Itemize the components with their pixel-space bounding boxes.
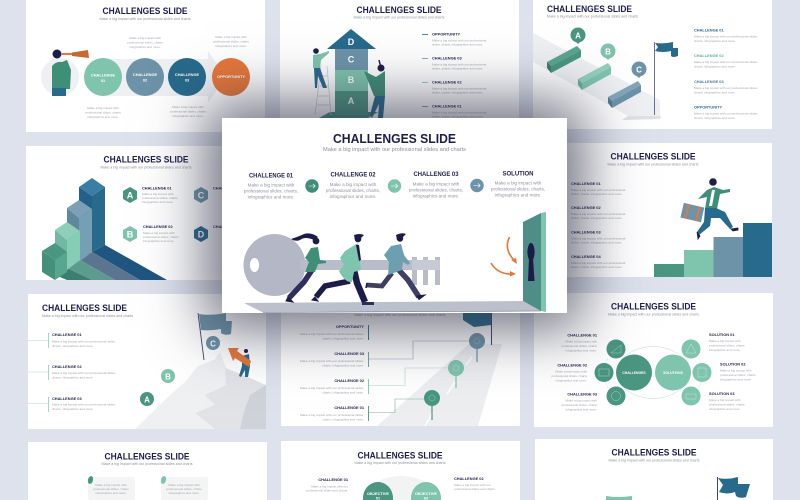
list: challenges text: Make a big impact with [556, 370, 587, 374]
arrow: challenge 01 to 02 [305, 179, 319, 193]
list: solutions text: Make a big impact with [709, 339, 741, 343]
list: solutions text: professional slides, charts [720, 373, 756, 377]
panel: slide with challenges and solutions cycle [534, 293, 773, 427]
list: stair challenges: slides, charts, infographics and more. [571, 265, 622, 269]
list: solutions text: infographics and more. [709, 348, 741, 352]
panel: featured slide background with shadow [222, 118, 567, 313]
icon: mint flag [606, 496, 632, 500]
list: house levels: Make a big impact with our professional [432, 62, 487, 66]
chart: objective shapes: OBJECTIVE [367, 491, 389, 496]
list: mountain challenges: charts, infographics and more. [52, 407, 94, 411]
text: slide 7 subtitle: Make a big impact with our professional slides and charts [42, 314, 133, 318]
card: second card [160, 475, 208, 500]
chart: arrow house with letters: B [348, 75, 355, 85]
icon: person on ladder [313, 48, 329, 88]
chart: stairs [654, 223, 772, 277]
list: mountain challenges: CHALLENGE 02 [52, 364, 82, 369]
circle: challenge 03: CHALLENGE [175, 72, 200, 77]
list: road challenges [694, 28, 758, 120]
icon: door with keyhole [523, 212, 546, 312]
icon: running man with briefcase [680, 178, 738, 239]
text: slide 1 subtitle: Make a big impact with our professional slides and charts [99, 17, 191, 21]
list: mountain challenges: charts, infographics and more. [52, 344, 94, 348]
icon: mountain [135, 352, 266, 429]
list: road challenges: CHALLENGE 03 [694, 79, 724, 84]
chart: isometric bars [42, 178, 167, 280]
list: road levels: CHALLENGE 03 [334, 351, 365, 356]
circle: opportunity [212, 58, 250, 96]
circle: challenge 01 [84, 58, 122, 96]
list: road levels: Make a big impact with our professional slides, [300, 413, 364, 417]
icon: block C with marker [608, 62, 646, 108]
list: solutions text: SOLUTION 02 [720, 362, 746, 366]
icon: block A with marker [547, 28, 586, 73]
icon: finish flag [622, 42, 678, 120]
list: stair challenges: Make a big impact with our professional [571, 212, 626, 216]
text: circle captions: infographics and more. [87, 115, 119, 119]
list: house levels [422, 32, 487, 118]
list: solutions text: professional slides, charts [709, 344, 745, 348]
text: circle captions [85, 35, 249, 119]
icon: block B with marker [578, 44, 616, 90]
list: house levels: Make a big impact with our professional [432, 86, 487, 90]
text: circle captions: professional slides, charts [213, 40, 249, 44]
list: stair challenges: Make a big impact with our professional [571, 261, 626, 265]
list: stair challenges: slides, charts, infographics and more. [571, 216, 622, 220]
list: road challenges: Make a big impact with our professional slides, [694, 60, 758, 64]
circle: challenge 03: 03 [185, 78, 190, 82]
panel: slide with mountain climb [28, 294, 266, 429]
text block: solution: Make a big impact with [495, 180, 542, 186]
list: road challenges: charts, infographics and more. [694, 64, 736, 68]
text: circle captions: Make a big impact with [87, 106, 119, 110]
text block: solution: SOLUTION [502, 170, 534, 178]
card: second card: infographics and more. [168, 491, 200, 495]
list: solutions text: Make a big impact with [720, 368, 752, 372]
icon: climber with orange arrow [228, 348, 251, 377]
list: house levels: Make a big impact with our professional [432, 38, 487, 42]
circle: marker C: C [210, 340, 216, 348]
text block: challenge 03: infographics and more. [413, 194, 459, 198]
icon: ladder [315, 66, 331, 115]
list: challenges text: CHALLENGE 02 [557, 362, 588, 368]
icon: hexagon C: CHALLENGE 03 [213, 186, 243, 190]
icon: block A with marker: A [575, 32, 581, 40]
icon: diagonal road [533, 33, 660, 118]
list: solutions text: SOLUTION 01 [709, 332, 735, 337]
circle: marker B [161, 369, 175, 383]
list: challenges text [551, 332, 598, 412]
card: first card: Make a big impact with [95, 483, 127, 487]
list: challenges text: infographics and more. [566, 408, 597, 412]
heading: slide 4 title: CHALLENGES SLIDE [104, 154, 188, 166]
icon: hexagon B with text [123, 224, 179, 243]
icon: block C with marker: C [636, 66, 642, 74]
heading: slide 9 title: CHALLENGES SLIDE [611, 302, 696, 312]
text: slide 5 subtitle: Make a big impact with our professional slides and charts [607, 162, 699, 166]
icon: hexagon C [194, 186, 243, 203]
text: circle captions: infographics and more. [215, 44, 247, 48]
list: road levels: charts, infographics and more. [322, 336, 364, 340]
card: first card: professional slides, charts [93, 487, 129, 491]
text: challenge 02: Make a big impact with our [454, 483, 491, 487]
icon: running woman [286, 233, 326, 302]
list: solutions text: professional slides, charts [709, 402, 745, 406]
chart: arrow house with letters: A [348, 96, 355, 106]
text block: challenge 03: professional slides, charts, [409, 188, 463, 192]
text block: challenge 01 [244, 172, 298, 200]
list: road challenges: charts, infographics and more. [694, 116, 736, 120]
icon: hexagon A with text: Make a big impact with [142, 192, 174, 196]
circle: challenge 01: CHALLENGE [91, 72, 116, 78]
heading: slide 3 title: CHALLENGES SLIDE [547, 4, 632, 15]
text: circle captions: professional slides, charts [85, 110, 121, 114]
text: challenge 02: professional slides and charts. [454, 487, 496, 491]
chart: arrow house with letters: C [348, 54, 355, 64]
text: slide 10 subtitle: Make a big impact with our professional slides and charts [101, 462, 193, 466]
list: stair challenges: slides, charts, infographics and more. [571, 240, 622, 244]
list: mountain challenges: Make a big impact with our professional slides, [52, 371, 116, 375]
list: house levels: slides, charts, infographics and more. [432, 42, 483, 46]
card: first card: infographics and more. [95, 491, 127, 495]
circle: marker A: A [144, 396, 150, 404]
icon: running man in slate [366, 233, 425, 300]
icon: hexagon D: D [198, 230, 205, 240]
chart: cycle diagram: CHALLENGES [622, 371, 646, 375]
list: road levels: charts, infographics and more. [322, 418, 364, 422]
text block: solution: infographics and more. [495, 192, 541, 198]
heading: slide 1 title: CHALLENGES SLIDE [102, 6, 188, 17]
icon: flag on summit [198, 313, 232, 360]
icon: running man in mint [312, 234, 374, 305]
text: challenge 02 [454, 476, 496, 491]
heading: slide 2 title: CHALLENGES SLIDE [356, 5, 442, 16]
icon: hexagon D [194, 224, 243, 242]
list: road levels: CHALLENGE 01 [334, 405, 365, 410]
list: solutions text [709, 332, 756, 411]
text block: solution [491, 170, 545, 198]
list: mountain challenges: charts, infographics and more. [52, 376, 94, 380]
panel: slide with man climbing stairs [540, 143, 772, 277]
panel: slide with arrow house and two people [280, 0, 519, 120]
panel: bottom left slide with cards [28, 442, 267, 500]
text block: challenge 01: CHALLENGE 01 [249, 172, 294, 180]
text: featured subtitle: Make a big impact with our professional slides and charts [323, 147, 466, 153]
list: challenges text: CHALLENGE 01 [567, 332, 598, 338]
text block: challenge 01: professional slides, charts, [244, 188, 298, 194]
list: challenges text: CHALLENGE 03 [567, 392, 598, 396]
text: slide 2 subtitle: Make a big impact with our professional slides and charts [353, 16, 445, 20]
list: challenges text: professional slides, charts [551, 374, 587, 378]
circle: marker B: B [165, 372, 171, 382]
text: challenge 01 [306, 477, 349, 492]
list: house levels: slides, charts, infographics and more. [432, 90, 483, 94]
circle: marker C [206, 336, 220, 350]
text: challenge 01: Make a big impact with our [311, 484, 348, 488]
text block: challenge 01: infographics and more. [248, 194, 294, 200]
list: road challenges: OPPORTUNITY [694, 104, 723, 110]
list: mountain challenges: CHALLENGE 01 [52, 332, 82, 337]
list: road challenges: CHALLENGE 02 [694, 53, 724, 58]
circle: challenge 02: 02 [143, 78, 148, 82]
text block: challenge 02 [326, 172, 380, 199]
chart: objective shapes [363, 476, 441, 500]
circle: challenge 02: CHALLENGE [133, 72, 158, 77]
icon: hexagon A with text [123, 186, 178, 204]
text: circle captions: professional slides, charts [127, 40, 163, 44]
icon: hexagon D: CHALLENGE 04 [213, 224, 243, 229]
list: road levels: CHALLENGE 02 [334, 378, 365, 383]
list: solutions text: SOLUTION 03 [709, 391, 735, 396]
card: second card: Make a big impact with [168, 483, 200, 487]
text: slide 4 subtitle: Make a big impact with our professional slides and charts [100, 166, 192, 170]
card: first card [87, 475, 135, 500]
text: slide 3 subtitle: Make a big impact with our professional slides and charts [547, 14, 638, 18]
text block: challenge 02: infographics and more. [330, 194, 376, 199]
circle: challenge 02 [126, 58, 164, 96]
heading: slide 10 title: CHALLENGES SLIDE [104, 452, 190, 462]
text: slide 9 subtitle: Make a big impact with our professional slides and charts [608, 312, 699, 316]
chart: arrow house with letters: D [348, 37, 355, 47]
list: challenges text: infographics and more. [566, 348, 597, 352]
list: road challenges: charts, infographics and more. [694, 39, 736, 43]
list: challenges text: professional slides, charts [561, 403, 597, 407]
list: house levels: CHALLENGE 02 [432, 80, 462, 84]
text block: challenge 03: Make a big impact with [413, 182, 460, 186]
text: challenge 01: CHALLENGE 01 [318, 477, 349, 482]
list: road challenges: Make a big impact with our professional slides, [694, 112, 758, 116]
list: challenges text: Make a big impact with [566, 340, 597, 344]
list: house levels: OPPORTUNITY [432, 32, 461, 36]
icon: arrow band behind circles [100, 51, 226, 103]
list: stair challenges: CHALLENGE 01 [571, 181, 601, 186]
text: challenge 01: professional slides and charts. [306, 488, 348, 492]
list: road levels: charts, infographics and more. [322, 364, 364, 368]
text: challenge 02: CHALLENGE 02 [454, 476, 484, 481]
arrow: challenge 03 to solution [470, 179, 484, 192]
list: stair challenges: Make a big impact with our professional [571, 188, 626, 192]
text block: challenge 02: CHALLENGE 02 [330, 172, 376, 178]
icon: road [377, 340, 502, 426]
circle: marker A [140, 392, 154, 406]
text block: challenge 02: Make a big impact with [330, 182, 377, 187]
list: house levels: slides, charts, infographics and more. [432, 66, 483, 70]
text: circle captions: Make a big impact with [129, 36, 161, 40]
text: circle captions: Make a big impact with [215, 35, 247, 39]
icon: flag on road [463, 310, 492, 345]
list: mountain challenges [28, 332, 116, 412]
text block: challenge 01: Make a big impact with [248, 182, 295, 188]
text block: challenge 03 [409, 171, 463, 198]
icon: large key [244, 234, 440, 296]
list: road challenges: Make a big impact with our professional slides, [694, 34, 758, 38]
heading: slide 7 title: CHALLENGES SLIDE [42, 303, 127, 314]
chart: objective shapes: OBJECTIVE [415, 491, 437, 496]
heading: slide 5 title: CHALLENGES SLIDE [610, 152, 696, 162]
panel: slide with telescope and challenge circles [26, 0, 265, 132]
panel: slide with isometric bars [26, 146, 266, 280]
text: slide 11 subtitle: Make a big impact with our professional slides and charts [354, 461, 446, 465]
list: road challenges: CHALLENGE 01 [694, 28, 724, 32]
list: solutions text: Make a big impact with [709, 398, 741, 402]
circle: opportunity: OPPORTUNITY [217, 74, 245, 79]
list: stair challenges: CHALLENGE 03 [571, 230, 601, 234]
text: circle captions: professional slides, charts [170, 110, 206, 114]
icon: hexagon C: C [198, 190, 205, 200]
text block: solution: professional slides, charts, [491, 186, 545, 192]
panel: bottom right slide with flag [535, 439, 773, 500]
chart: pins and connectors [369, 333, 485, 420]
list: solutions text: infographics and more. [709, 407, 741, 411]
panel: slide with blocks on a road and flag [533, 0, 772, 129]
list: house levels: slides, charts, infographics and more. [432, 114, 483, 118]
icon: floor platform [244, 301, 541, 312]
list: mountain challenges: CHALLENGE 03 [52, 396, 82, 401]
text: slide 12 subtitle: Make a big impact with our professional slides and charts [608, 458, 700, 462]
list: road levels: OPPORTUNITY [336, 324, 364, 329]
list: house levels: CHALLENGE 03 [432, 56, 462, 60]
chart: cycle diagram: SOLUTIONS [663, 371, 684, 375]
list: road challenges: Make a big impact with our professional slides, [694, 86, 758, 90]
heading: slide 11 title: CHALLENGES SLIDE [358, 450, 442, 462]
list: road levels [300, 324, 369, 422]
list: solutions text: infographics and more. [720, 378, 752, 382]
icon: hexagon B with text: Make a big impact with [143, 231, 175, 235]
list: stair challenges [571, 181, 626, 269]
icon: hexagon A with text: A [127, 190, 134, 200]
circle: challenge 03 [168, 58, 206, 96]
list: road challenges: charts, infographics and more. [694, 90, 736, 94]
panel: slide with road and pins [281, 300, 520, 426]
arrow: challenge 02 to 03 [388, 179, 401, 193]
icon: hexagon B with text: professional slides, charts [143, 235, 179, 239]
list: road levels: charts, infographics and more. [322, 390, 364, 394]
icon: hexagon A with text: CHALLENGE 01 [142, 186, 172, 190]
icon: hexagon A with text: professional slides, charts [142, 196, 178, 200]
list: challenges text: professional slides, charts [561, 344, 597, 348]
text block: challenge 03: CHALLENGE 03 [414, 171, 459, 178]
panel: bottom middle slide with objectives [281, 441, 520, 500]
list: house levels: CHALLENGE 01 [432, 104, 462, 108]
icon: block B with marker: B [605, 48, 611, 56]
list: challenges text: infographics and more. [556, 378, 587, 382]
icon: hexagon B with text: B [127, 230, 134, 240]
text: slide 8 subtitle: Make a big impact with our professional slides and charts [354, 313, 446, 317]
icon: hexagon A with text: infographics and more. [142, 200, 174, 204]
text: circle captions: Make a big impact with [172, 105, 204, 109]
list: stair challenges: Make a big impact with our professional [571, 236, 626, 240]
text: circle captions: infographics and more. [129, 45, 161, 49]
text block: challenge 02: professional slides, charts, [326, 188, 380, 193]
arrow: orange rotation arrows [491, 237, 517, 276]
icon: hexagon B with text: CHALLENGE 02 [143, 224, 173, 229]
list: house levels: Make a big impact with our professional [432, 110, 487, 114]
list: mountain challenges: Make a big impact with our professional slides, [52, 340, 116, 344]
list: road levels: Make a big impact with our professional slides, [300, 332, 364, 336]
chart: arrow house with letters [319, 29, 378, 118]
list: road levels: Make a big impact with our professional slides, [300, 359, 364, 363]
list: stair challenges: CHALLENGE 04 [571, 254, 601, 259]
heading: slide 12 title: CHALLENGES SLIDE [612, 448, 696, 458]
text: circle captions: infographics and more. [172, 114, 204, 118]
icon: standing person [364, 60, 385, 118]
list: stair challenges: CHALLENGE 02 [571, 205, 601, 210]
list: stair challenges: slides, charts, infographics and more. [571, 192, 622, 196]
card: second card: professional slides, charts [166, 487, 202, 491]
circle: challenge 01: 01 [101, 78, 106, 83]
icon: person with telescope [41, 50, 89, 96]
heading: featured title: CHALLENGES SLIDE [333, 131, 456, 146]
list: road levels: Make a big impact with our professional slides, [300, 386, 364, 390]
list: mountain challenges: Make a big impact with our professional slides, [52, 402, 116, 406]
icon: hexagon B with text: infographics and more. [143, 239, 175, 243]
list: challenges text: Make a big impact with [566, 398, 597, 402]
chart: cycle diagram [594, 340, 712, 406]
icon: blue flag [717, 477, 750, 500]
